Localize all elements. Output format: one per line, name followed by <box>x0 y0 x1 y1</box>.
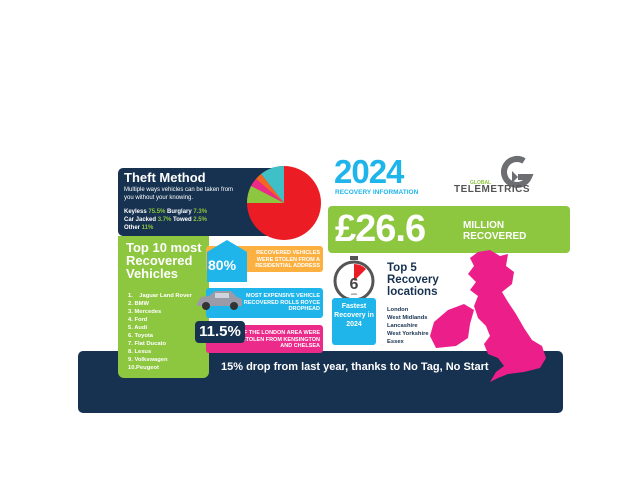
map: UK <box>430 250 546 382</box>
heading: top 5 locations: locations <box>387 286 437 298</box>
icon: stopwatch: min <box>351 292 357 296</box>
list: 4. Ford <box>128 317 147 323</box>
logo: GLOBAL <box>470 180 491 186</box>
list: locations <box>387 307 429 345</box>
stats: Keyless 75.5% Burglary 7.3% <box>124 209 207 215</box>
heading: Top 10 most Recovered Vehicles <box>126 240 202 281</box>
list: 6. Toyota <box>128 333 153 339</box>
banner text: 15% drop from last year, thanks to No Tag, No Start <box>221 361 489 373</box>
title: 2024: 2024 <box>334 153 403 190</box>
list: locations: Essex <box>387 339 404 345</box>
panel: 26.6 million <box>328 206 570 253</box>
callout: 80% <box>206 246 323 272</box>
panel: fastest recovery: Fastest Recovery in 2024 <box>334 303 374 328</box>
list: 1. Jaguar Land Rover <box>128 293 192 299</box>
stats <box>124 208 207 231</box>
icon: stopwatch: 6 <box>350 276 359 293</box>
heading: top 5 locations <box>387 262 439 298</box>
callout: 11.5%: OF THE LONDON AREA WERE STOLEN FROM KENSINGTON AND CHELSEA <box>240 330 320 349</box>
bottom banner <box>78 351 563 413</box>
panel: 26.6 million: £26.6 <box>335 208 425 250</box>
logo <box>454 156 534 195</box>
icon: house 80% <box>207 240 247 282</box>
list: 10.Peugeot <box>128 365 159 371</box>
list: 3. Mercedes <box>128 309 161 315</box>
panel: fastest recovery <box>332 298 376 345</box>
heading: top 5 locations: Recovery <box>387 274 439 286</box>
logo: TELEMETRICS <box>454 184 530 195</box>
stats: Other 11% <box>124 225 153 231</box>
list: 7. Flat Ducato <box>128 341 166 347</box>
list: 5. Audi <box>128 325 147 331</box>
heading: top 5 locations: Top 5 <box>387 262 417 274</box>
callout: most expensive: MOST EXPENSIVE VEHICLE RECOVERED ROLLS ROYCE DROPHEAD <box>244 293 320 312</box>
subtitle: RECOVERY INFORMATION <box>335 189 418 196</box>
icon: house 80%: 80% <box>208 257 236 273</box>
list: locations: Lancashire <box>387 323 418 329</box>
text: RECOVERED VEHICLES WERE STOLEN FROM A RESIDENTIAL ADDRESS <box>255 250 320 269</box>
list: locations: West Yorkshire <box>387 331 429 337</box>
panel: 26.6 million: RECOVERED <box>463 231 526 242</box>
list: 9. Volkswagen <box>128 357 168 363</box>
panel: 26.6 million: MILLION <box>463 220 504 231</box>
label: 11.5%: 11.5% <box>199 323 241 340</box>
list: locations: London <box>387 307 408 313</box>
panel: top 10 vehicles <box>118 236 209 378</box>
heading: Theft Method <box>124 170 206 185</box>
icon: stopwatch <box>334 256 374 298</box>
panel: theft method <box>118 168 278 236</box>
list <box>128 293 192 371</box>
callout: most expensive <box>206 288 323 318</box>
list: locations: West Midlands <box>387 315 427 321</box>
list: 8. Lexus <box>128 349 151 355</box>
callout: 11.5% <box>206 325 323 353</box>
description: Multiple ways vehicles can be taken from you without your knowing. <box>124 187 233 201</box>
stats: Car Jacked 3.7% Towed 2.5% <box>124 217 207 223</box>
pie chart <box>247 166 321 240</box>
list: 2. BMW <box>128 301 149 307</box>
label: 11.5% <box>195 321 245 343</box>
icon: car <box>197 291 242 310</box>
